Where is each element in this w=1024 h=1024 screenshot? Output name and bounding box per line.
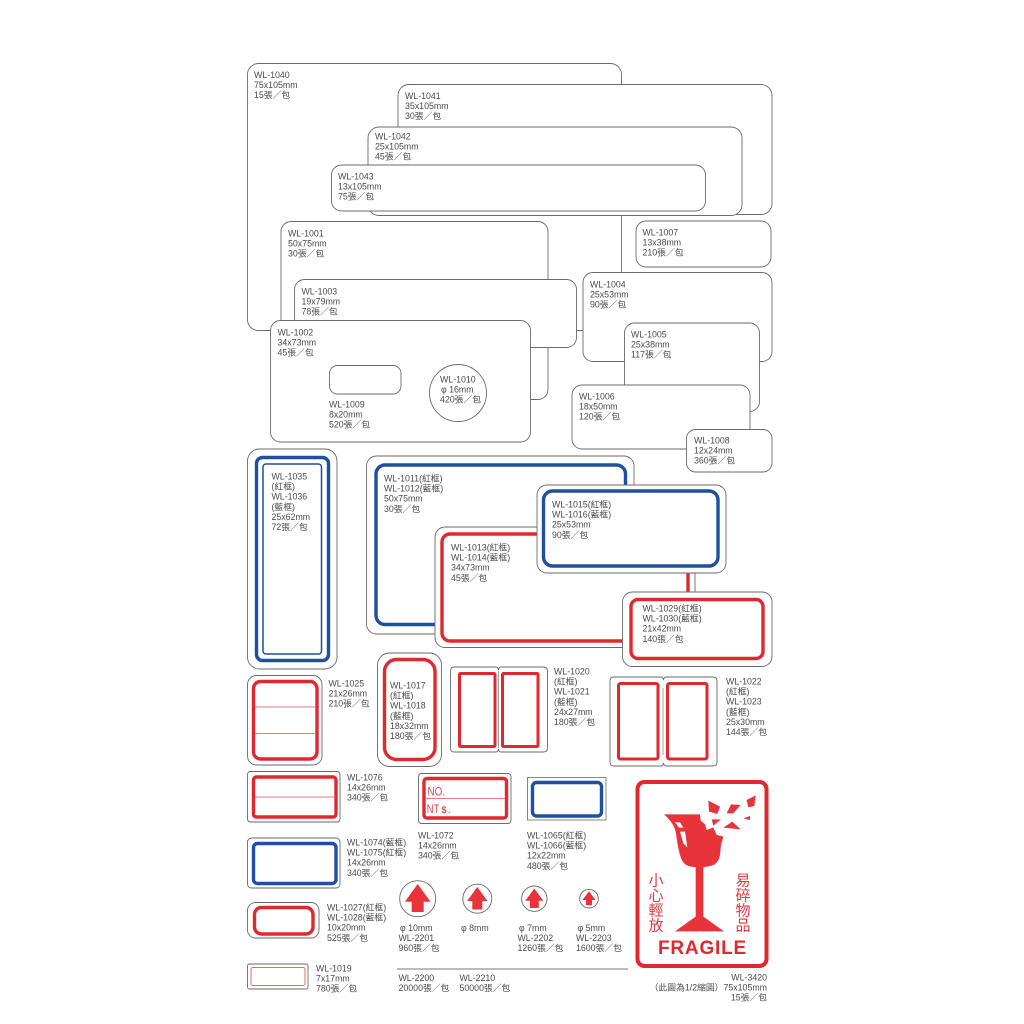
arrow sticker: 5mm WL-2203: 1600張／包 (576, 942, 622, 953)
label: WL-1019: 7x17mm (316, 974, 350, 984)
label: WL-1007 (636, 221, 771, 267)
label: WL-1001 (281, 222, 548, 400)
label: WL-1035 / WL-1036: 25x62mm (272, 512, 310, 522)
label: WL-1017 / WL-1018: WL-1018 (390, 701, 426, 711)
icon: broken wine glass (664, 795, 756, 931)
label: WL-1013 / WL-1014: 34x73mm (451, 563, 490, 573)
label: WL-1009: 8x20mm (329, 410, 363, 420)
label: WL-1027 / WL-1028: 525張／包 (327, 932, 368, 943)
label: WL-1040 (248, 64, 622, 330)
arrow sticker: 10mm WL-2201: φ 10mm (400, 923, 433, 933)
label: WL-1010 (430, 364, 486, 422)
label: WL-1001: WL-1001 (288, 228, 324, 238)
label: WL-1076: 340張／包 (347, 792, 388, 803)
label: WL-1017 / WL-1018: 180張／包 (390, 730, 431, 741)
label: WL-1041: WL-1041 (405, 91, 441, 101)
label: WL-1015 / WL-1016: WL-1015(紅框) (552, 498, 611, 510)
label: WL-1042: WL-1042 (375, 132, 411, 142)
label: WL-1041: 30張／包 (405, 110, 441, 121)
label: WL-1010: φ 16mm (441, 385, 474, 395)
label: WL-1076 (248, 772, 388, 822)
label: WL-1065 / WL-1066: WL-1066(藍框) (527, 840, 586, 851)
vertical text: 易碎物品: 物 (735, 902, 751, 920)
label: WL-1072: NT (427, 802, 440, 816)
label: WL-1025: 21x26mm (328, 689, 367, 699)
label: WL-1002 with WL-1009 and WL-1010 (270, 320, 530, 442)
label: WL-1005: 25x38mm (631, 340, 670, 350)
label: WL-1005: 117張／包 (631, 349, 672, 360)
label: WL-1074 / WL-1075: WL-1074(藍框) (347, 836, 406, 848)
label: WL-1003: WL-1003 (302, 286, 337, 296)
label: WL-1009: 520張／包 (329, 419, 370, 430)
label: WL-1072: WL-1072 (418, 830, 454, 840)
vertical text: 易碎物品: 易 (735, 872, 751, 890)
arrow sticker: 7mm WL-2202: WL-2202 (518, 933, 553, 943)
label: WL-1020 / WL-1021: WL-1021 (554, 687, 590, 697)
label: WL-1010: 420張／包 (440, 394, 481, 405)
label: WL-1015 / WL-1016: 25x53mm (552, 520, 591, 530)
vertical text: 小心輕放: 心 (648, 888, 664, 904)
label: WL-1020 / WL-1021: (紅框) (554, 676, 578, 687)
label: WL-1042: 25x105mm (375, 142, 419, 152)
label: WL-1029 / WL-1030: WL-1029(紅框) (642, 602, 702, 614)
arrow sticker: 7mm WL-2202: 1260張／包 (518, 942, 564, 953)
label: WL-1015 / WL-1016: WL-1016(藍框) (552, 509, 611, 520)
label: WL-1017 / WL-1018: WL-1017 (390, 680, 426, 690)
label: WL-1013 / WL-1014: WL-1013(紅框) (451, 542, 510, 552)
label: WL-1043: WL-1043 (338, 172, 374, 182)
label: WL-1011 / WL-1012 (366, 456, 634, 634)
vertical text: 小心輕放: 輕 (648, 902, 664, 920)
roll packs: WL-2200 and WL-2210 (397, 969, 628, 993)
label: WL-1041: 35x105mm (405, 101, 449, 111)
arrow sticker: 5mm WL-2203: φ 5mm (578, 923, 605, 933)
label: WL-1008: 360張／包 (694, 455, 735, 466)
label: WL-1003: 19x79mm (302, 297, 340, 307)
label: WL-1076: WL-1076 (347, 772, 383, 782)
label: WL-1003 (294, 280, 576, 348)
label: WL-1040: 15張／包 (254, 89, 290, 100)
label: WL-1017 / WL-1018: (藍框) (390, 710, 414, 721)
arrow sticker: 8mm: φ 8mm (461, 923, 489, 933)
vertical text: 易碎物品: 品 (735, 918, 751, 934)
caption: WL-3420: （此圖為1/2縮圖）75x105mm (650, 982, 767, 993)
label: WL-1035 / WL-1036: (紅框) (272, 481, 295, 492)
label: WL-1008 (686, 430, 772, 472)
label: WL-1004: 90張／包 (590, 299, 626, 310)
vertical text: 小心輕放: 小 (648, 872, 664, 890)
label: WL-1040: 75x105mm (254, 80, 298, 90)
label: WL-1074 / WL-1075: 340張／包 (347, 867, 388, 878)
label: WL-1013 / WL-1014: WL-1014(藍框) (451, 552, 510, 563)
label: WL-1074 / WL-1075: WL-1075(紅框) (347, 847, 406, 858)
label: WL-1029 / WL-1030: WL-1030(藍框) (642, 613, 702, 624)
label: WL-1072: 14x26mm (418, 841, 457, 851)
arrow sticker: 10mm WL-2201: 960張／包 (398, 942, 440, 953)
label: WL-1027 / WL-1028: 10x20mm (327, 923, 366, 933)
label: WL-1015 / WL-1016 (537, 485, 726, 573)
label: WL-1011 / WL-1012: WL-1011(紅框) (384, 472, 443, 484)
label: WL-1072 (418, 774, 511, 861)
label: WL-1035 / WL-1036: WL-1035 (272, 472, 307, 482)
arrow sticker: 5mm WL-2203: WL-2203 (576, 933, 612, 943)
label: WL-1065 / WL-1066: 480張／包 (527, 860, 568, 871)
word: FRAGILE: FRAGILE (658, 938, 747, 959)
label: WL-1007: 13x38mm (642, 238, 681, 248)
label: WL-1006 (572, 385, 750, 449)
label: WL-1005 (624, 323, 760, 412)
label: WL-1072: 340張／包 (418, 850, 459, 861)
label: WL-1001: 50x75mm (288, 239, 327, 249)
caption: WL-3420: 15張／包 (731, 992, 767, 1003)
label: WL-1011 / WL-1012: 50x75mm (384, 494, 423, 504)
label: WL-1002 with WL-1009 and WL-1010: 45張／包 (278, 347, 314, 358)
label: WL-1007: WL-1007 (642, 228, 678, 238)
label: WL-1029 / WL-1030 (622, 592, 772, 666)
label: WL-1004: WL-1004 (590, 280, 626, 290)
label: WL-1020 / WL-1021: 180張／包 (554, 716, 595, 727)
label: WL-1065 / WL-1066: 12x22mm (527, 851, 566, 861)
label: WL-1025 (248, 676, 370, 765)
label: WL-1022 / WL-1023: (紅框) (726, 686, 750, 697)
label: WL-1020 / WL-1021: 24x27mm (554, 707, 593, 717)
label: WL-1002 with WL-1009 and WL-1010: 34x73mm (278, 338, 316, 348)
arrow sticker: 7mm WL-2202: φ 7mm (519, 923, 547, 933)
label: WL-1029 / WL-1030: 21x42mm (642, 624, 681, 634)
label: WL-1025: WL-1025 (328, 678, 364, 688)
label: WL-1007: 210張／包 (642, 247, 684, 258)
label: WL-1019: WL-1019 (316, 964, 352, 974)
vertical text: 易碎物品: 碎 (735, 888, 751, 904)
label: WL-1020 / WL-1021: (藍框) (554, 696, 578, 707)
label: WL-1043: 13x105mm (338, 182, 382, 192)
label: WL-1076: 14x26mm (347, 783, 386, 793)
label: WL-1029 / WL-1030: 140張／包 (642, 633, 684, 644)
label: WL-1042: 45張／包 (375, 151, 411, 162)
label: WL-1011 / WL-1012: 30張／包 (384, 503, 420, 514)
label: WL-1011 / WL-1012: WL-1012(藍框) (384, 483, 443, 494)
label: WL-1022 / WL-1023: WL-1023 (726, 697, 762, 707)
label: WL-1072: . (448, 805, 451, 816)
label: WL-1040: WL-1040 (254, 70, 290, 80)
label: WL-1002 with WL-1009 and WL-1010: WL-1002 (278, 328, 313, 338)
label: WL-1020 / WL-1021: WL-1020 (554, 666, 590, 676)
label: WL-1035 / WL-1036: 72張／包 (272, 521, 308, 532)
label: WL-1025: 210張／包 (328, 698, 370, 709)
arrow sticker: 8mm (461, 884, 492, 933)
roll packs: WL-2200 and WL-2210: 20000張／包 (398, 982, 450, 993)
arrow sticker: 5mm WL-2203 (576, 889, 622, 953)
label: WL-1041 (398, 84, 772, 214)
label: WL-1042 (368, 127, 742, 216)
label: WL-1019: 780張／包 (316, 983, 357, 994)
label: WL-1017 / WL-1018: (紅框) (390, 690, 414, 701)
label: WL-1035 / WL-1036: (藍框) (272, 501, 295, 512)
label: WL-1065 / WL-1066 (527, 778, 606, 871)
label: WL-1006: WL-1006 (579, 392, 615, 402)
label: WL-1022 / WL-1023: 144張／包 (726, 726, 767, 737)
label: WL-1072: NO. (428, 784, 445, 798)
roll packs: WL-2200 and WL-2210: WL-2210 (460, 973, 495, 983)
label: WL-1035 / WL-1036 (248, 449, 337, 669)
label: WL-1006: 120張／包 (579, 411, 620, 422)
label: WL-1004: 25x53mm (590, 290, 629, 300)
label: WL-1005: WL-1005 (631, 330, 667, 340)
arrow sticker: 7mm WL-2202 (518, 886, 564, 953)
label: WL-1019 (248, 964, 357, 994)
label: WL-1043 (332, 165, 706, 211)
label: WL-1009: WL-1009 (329, 400, 365, 410)
label: WL-1022 / WL-1023: WL-1022 (726, 676, 762, 686)
label: WL-1074 / WL-1075 (248, 836, 406, 888)
label: WL-1027 / WL-1028 (248, 902, 386, 943)
roll packs: WL-2200 and WL-2210: WL-2200 (398, 973, 434, 983)
label: WL-1001: 30張／包 (288, 248, 324, 259)
label: WL-1008: 12x24mm (694, 446, 733, 456)
caption: WL-3420: WL-3420 (731, 972, 767, 982)
label: WL-1013 / WL-1014: 45張／包 (451, 572, 487, 583)
label: WL-1010: WL-1010 (440, 374, 476, 384)
label: WL-1027 / WL-1028: WL-1028(藍框) (327, 912, 386, 923)
label: WL-1022 / WL-1023: 25x30mm (726, 717, 765, 727)
label: WL-1017 / WL-1018 (378, 653, 442, 766)
arrow sticker: 10mm WL-2201: WL-2201 (398, 933, 434, 943)
label: WL-1072: $ (442, 805, 447, 815)
label: WL-1022 / WL-1023: (藍框) (726, 706, 750, 717)
label: WL-1015 / WL-1016: 90張／包 (552, 529, 588, 540)
vertical text: 小心輕放: 放 (648, 918, 664, 934)
label: WL-1009 (329, 366, 401, 430)
label: WL-1020 / WL-1021 (450, 666, 595, 752)
label: WL-1022 / WL-1023 (610, 676, 767, 766)
label: WL-1003: 78張／包 (302, 306, 338, 317)
label: WL-1043: 75張／包 (338, 191, 374, 202)
label: WL-1035 / WL-1036: WL-1036 (272, 492, 307, 502)
label: WL-1004 (583, 272, 772, 362)
label: WL-1074 / WL-1075: 14x26mm (347, 858, 386, 868)
label: WL-1027 / WL-1028: WL-1027(紅框) (327, 902, 386, 912)
arrow sticker: 10mm WL-2201 (398, 881, 440, 953)
label: WL-1006: 18x50mm (579, 402, 618, 412)
label: WL-1017 / WL-1018: 18x32mm (390, 721, 429, 731)
label: WL-1008: WL-1008 (694, 436, 730, 446)
roll packs: WL-2200 and WL-2210: 50000張／包 (460, 982, 511, 993)
label: WL-1065 / WL-1066: WL-1065(紅框) (527, 830, 586, 840)
label: WL-1013 / WL-1014 (435, 527, 695, 648)
fragile label: WL-3420 (638, 782, 767, 1003)
